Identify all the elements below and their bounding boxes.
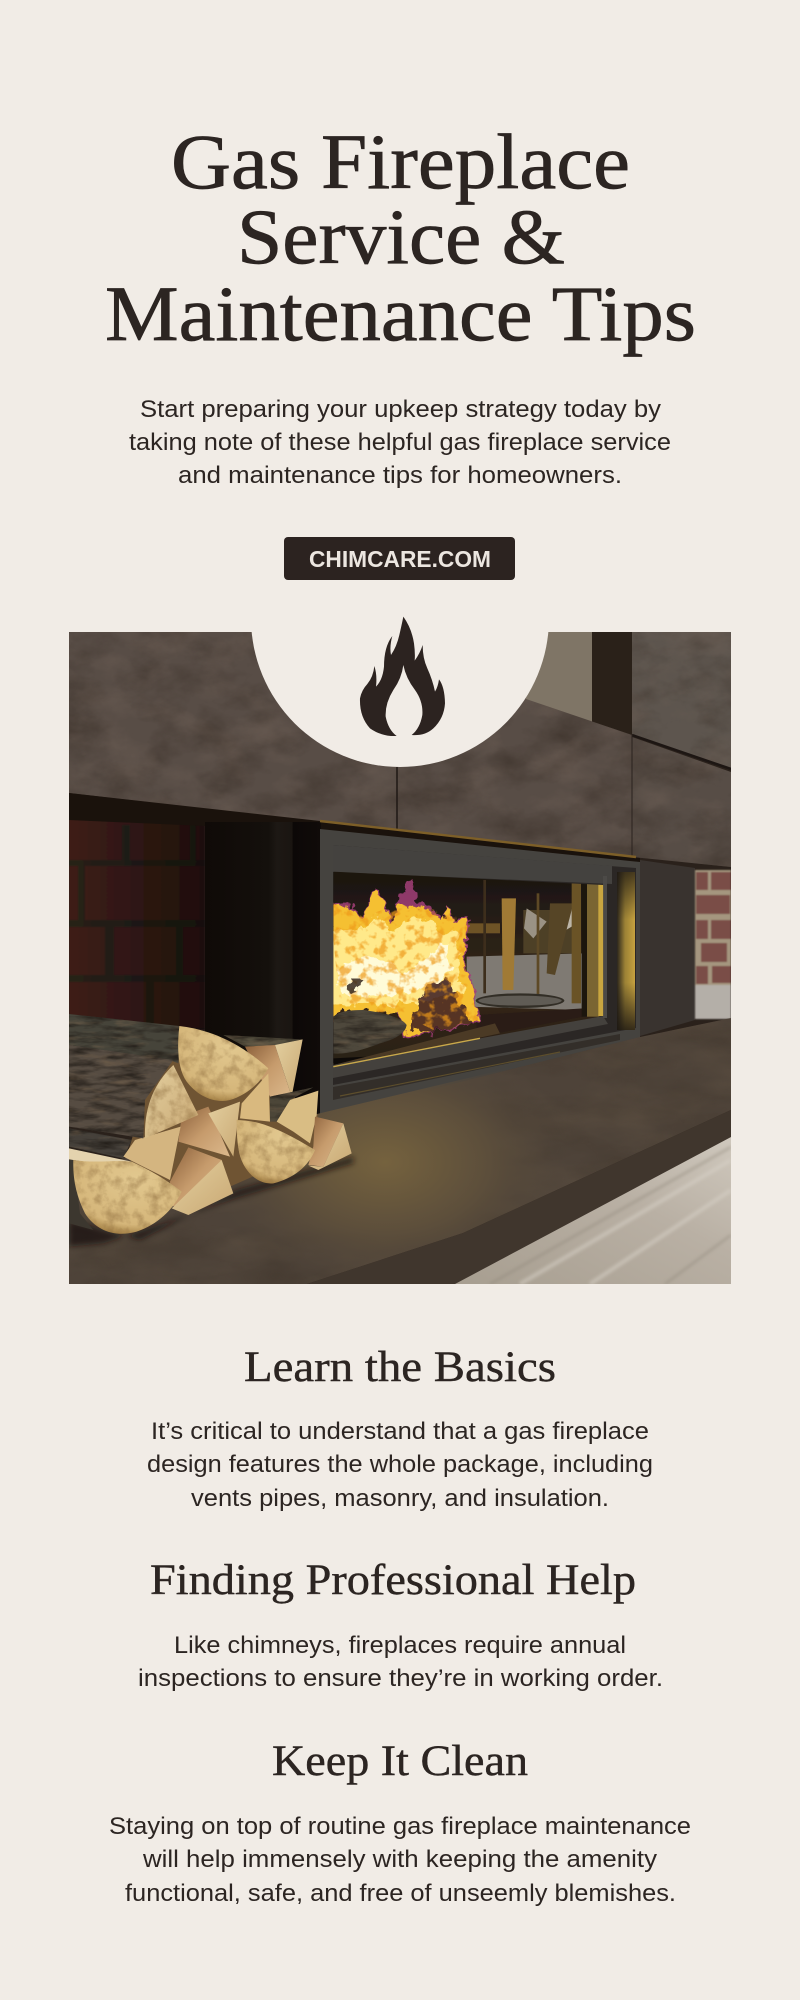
body text: [109, 1813, 691, 1907]
upper log face: [178, 1026, 268, 1101]
heading: Learn the Basics: [244, 1344, 556, 1391]
body text: It’s critical to understand that a gas fireplace: [151, 1418, 649, 1445]
title: Gas Fireplace: [171, 118, 630, 205]
log bark mass: [69, 1014, 181, 1180]
body text: [138, 1632, 663, 1692]
hearth slab: [69, 1018, 731, 1284]
burner logs: [333, 1010, 500, 1068]
icon: flame: [360, 617, 445, 736]
middle log face: [145, 1065, 198, 1138]
section: finding professional help: [138, 1557, 663, 1692]
website badge: CHIMCARE.COM: [309, 546, 491, 572]
body text: functional, safe, and free of unseemly blemishes.: [125, 1880, 676, 1907]
section: learn the basics: [147, 1344, 653, 1512]
intro text: Start preparing your upkeep strategy today by: [140, 396, 662, 423]
wood floor: [455, 1137, 731, 1284]
body text: Staying on top of routine gas fireplace maintenance: [109, 1813, 691, 1840]
body text: inspections to ensure they’re in working order.: [138, 1665, 663, 1692]
body text: [147, 1418, 653, 1512]
small inner wedge: [240, 1073, 270, 1122]
title: Service &: [237, 193, 565, 280]
centre wedge: [178, 1102, 240, 1157]
body text: will help immensely with keeping the amenity: [142, 1846, 658, 1873]
firewood stack: [69, 1014, 353, 1247]
section: keep it clean: [109, 1738, 691, 1907]
intro text: taking note of these helpful gas fireplace service: [129, 429, 671, 456]
intro text: [129, 396, 671, 489]
left brick wall: [69, 815, 205, 1034]
title: [105, 118, 696, 357]
title: Maintenance Tips: [105, 270, 696, 357]
body text: vents pipes, masonry, and insulation.: [191, 1485, 609, 1512]
front left log: [69, 1148, 182, 1234]
right wedge: [308, 1117, 352, 1170]
back wall and column: [526, 632, 592, 722]
reflected room: [330, 870, 607, 1070]
fire viewing glass: [330, 870, 607, 1070]
back right wedge: [223, 1035, 303, 1097]
right brick and plinth: [695, 870, 731, 1019]
mantel underside: [69, 793, 640, 866]
body text: Like chimneys, fireplaces require annual: [174, 1632, 626, 1659]
fireplace surround: [320, 821, 640, 1117]
body text: design features the whole package, including: [147, 1451, 653, 1478]
top circle cutout: [252, 632, 548, 767]
front right log face: [237, 1120, 315, 1183]
lower centre wedge: [170, 1147, 233, 1215]
stone mantel: [69, 632, 731, 867]
website badge: [284, 537, 515, 580]
stack filler: [129, 1055, 318, 1186]
heading: Keep It Clean: [272, 1738, 528, 1785]
log shadow: [69, 1157, 353, 1247]
flames: [330, 880, 480, 1038]
intro text: and maintenance tips for homeowners.: [178, 462, 622, 489]
heading: Finding Professional Help: [150, 1557, 636, 1604]
dark side columns: [205, 822, 695, 1122]
fireplace photo: [69, 632, 731, 1284]
right round log: [270, 1087, 318, 1143]
